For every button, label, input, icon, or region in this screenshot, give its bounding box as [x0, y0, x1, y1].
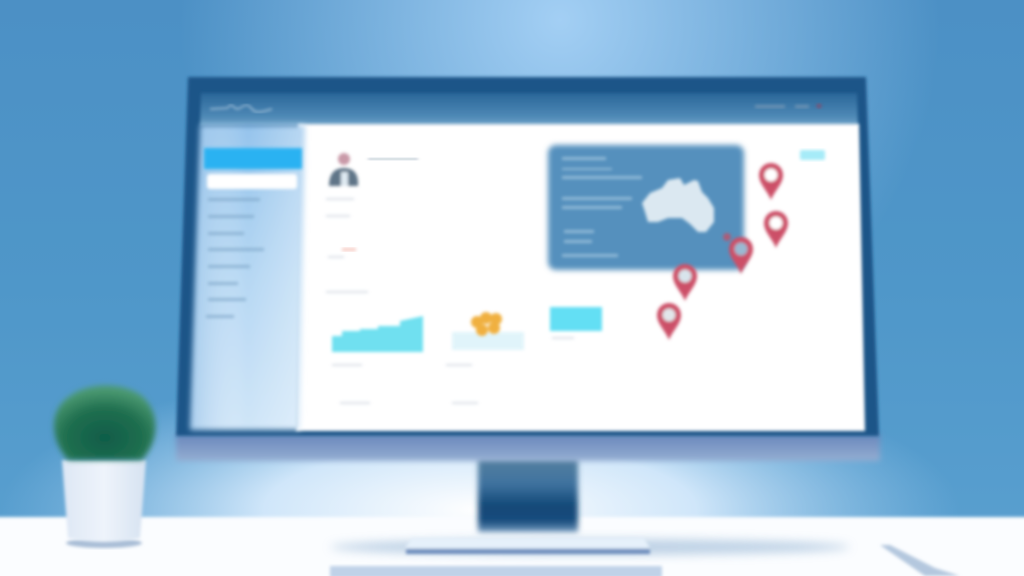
monitor stand — [405, 458, 650, 554]
pin 4 — [673, 264, 697, 301]
keyboard — [330, 566, 662, 576]
map panel background — [548, 145, 744, 270]
desk shadow — [330, 539, 850, 555]
monitor chin — [176, 434, 880, 461]
map panel text — [562, 157, 642, 257]
pin 2 — [764, 211, 788, 248]
map panel — [548, 145, 744, 270]
monitor — [176, 77, 880, 461]
sidebar — [190, 125, 305, 430]
cyan stat box — [550, 307, 602, 331]
logo in top bar — [210, 105, 272, 112]
user avatar — [329, 153, 358, 186]
plant — [54, 386, 156, 548]
main content area — [296, 124, 865, 431]
stand base — [405, 538, 650, 554]
orange cluster chart — [471, 312, 502, 336]
pot — [62, 460, 146, 542]
dot chart — [452, 332, 524, 350]
cyan badge — [800, 150, 825, 160]
status icons in top bar — [755, 104, 822, 108]
mouse and desk accessory — [880, 545, 960, 576]
sidebar menu lines — [206, 198, 264, 318]
sidebar active item — [204, 148, 302, 169]
bar chart — [332, 316, 423, 352]
user name — [368, 158, 418, 160]
faint text lines — [326, 198, 574, 404]
sidebar selected item — [207, 174, 297, 189]
foliage — [54, 386, 156, 460]
desk surface — [0, 517, 1024, 576]
map of Australia — [642, 178, 714, 232]
small red accent — [342, 248, 356, 251]
pin 1 — [759, 163, 783, 200]
plant shadow — [66, 538, 142, 548]
location pins — [657, 163, 788, 340]
top bar — [200, 93, 858, 126]
screen — [190, 93, 865, 431]
pin 3 — [729, 237, 753, 274]
monitor bezel — [176, 77, 879, 436]
pin 5 — [657, 303, 681, 340]
